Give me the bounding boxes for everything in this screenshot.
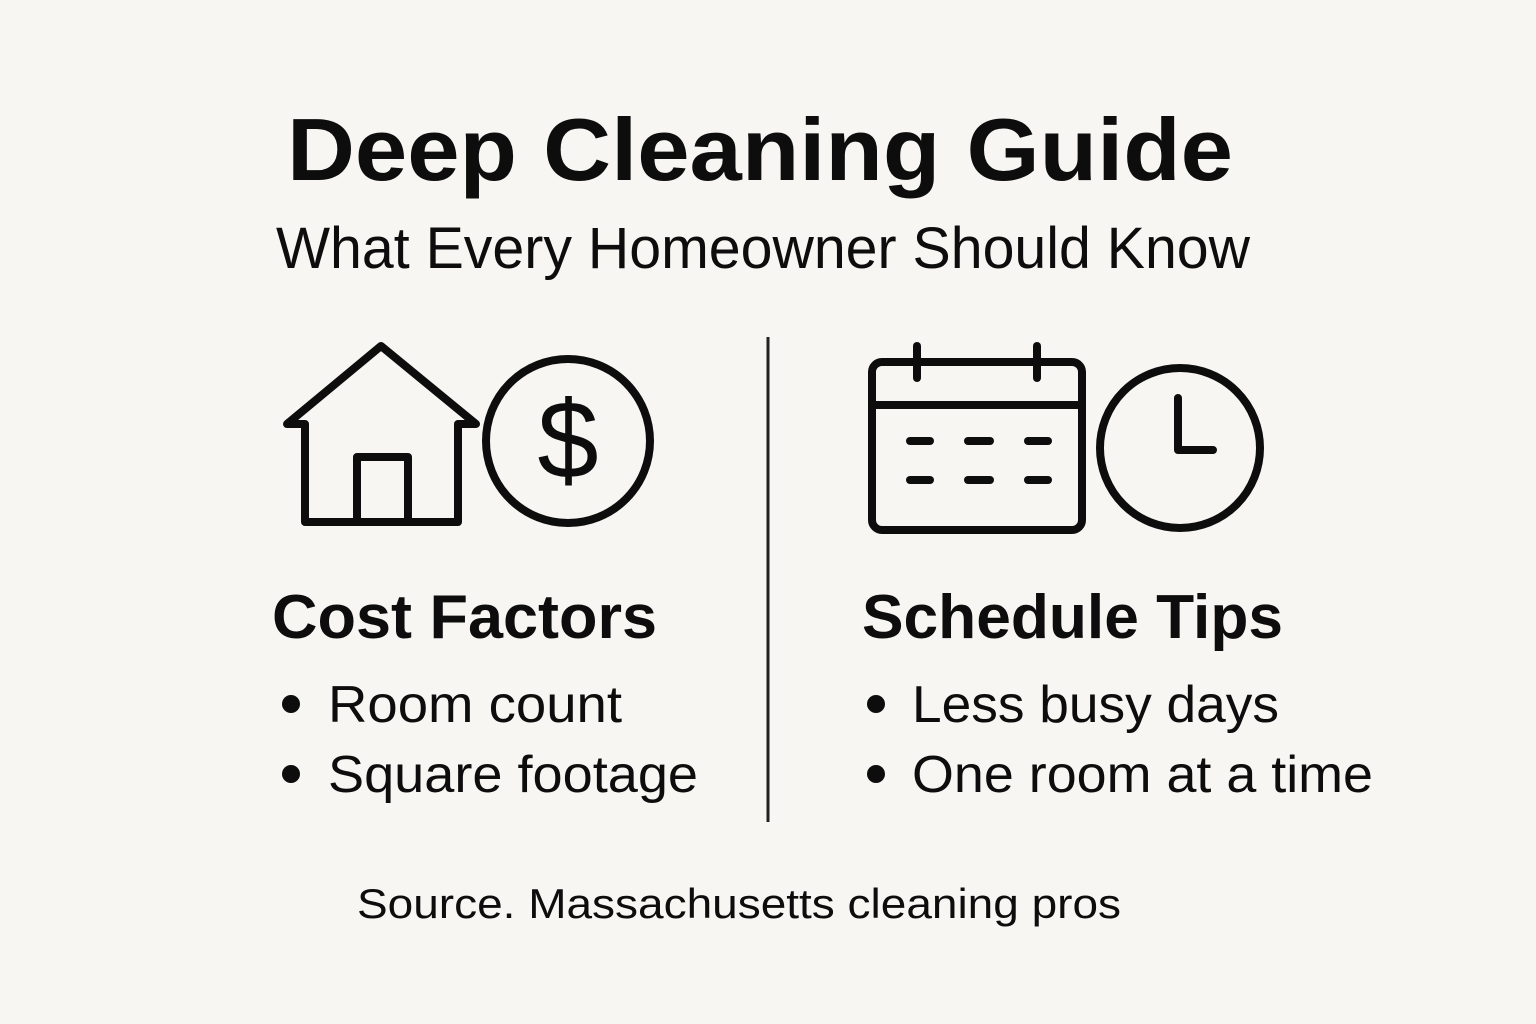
icon: house <box>287 346 476 522</box>
icon: dollar coin <box>486 359 650 523</box>
bullet list: schedule tips <box>867 676 1373 804</box>
icon: clock <box>1100 368 1260 528</box>
bullet list: cost factors <box>282 676 698 804</box>
bullet list: cost factors: Room count <box>328 676 623 734</box>
heading: cost factors: Cost Factors <box>272 583 657 652</box>
panel: cost factors <box>272 346 698 804</box>
icon: calendar <box>872 346 1082 530</box>
bullet list: schedule tips: One room at a time <box>912 746 1373 804</box>
panel: schedule tips <box>862 346 1373 804</box>
subtitle: What Every Homeowner Should Know <box>276 216 1251 281</box>
icon: dollar coin: $ <box>537 379 599 502</box>
bullet list: cost factors: Square footage <box>328 746 698 804</box>
source note: Source. Massachusetts cleaning pros <box>357 880 1121 927</box>
title: Deep Cleaning Guide <box>287 100 1233 199</box>
bullet list: schedule tips: Less busy days <box>912 676 1279 734</box>
heading: schedule tips: Schedule Tips <box>862 583 1283 652</box>
